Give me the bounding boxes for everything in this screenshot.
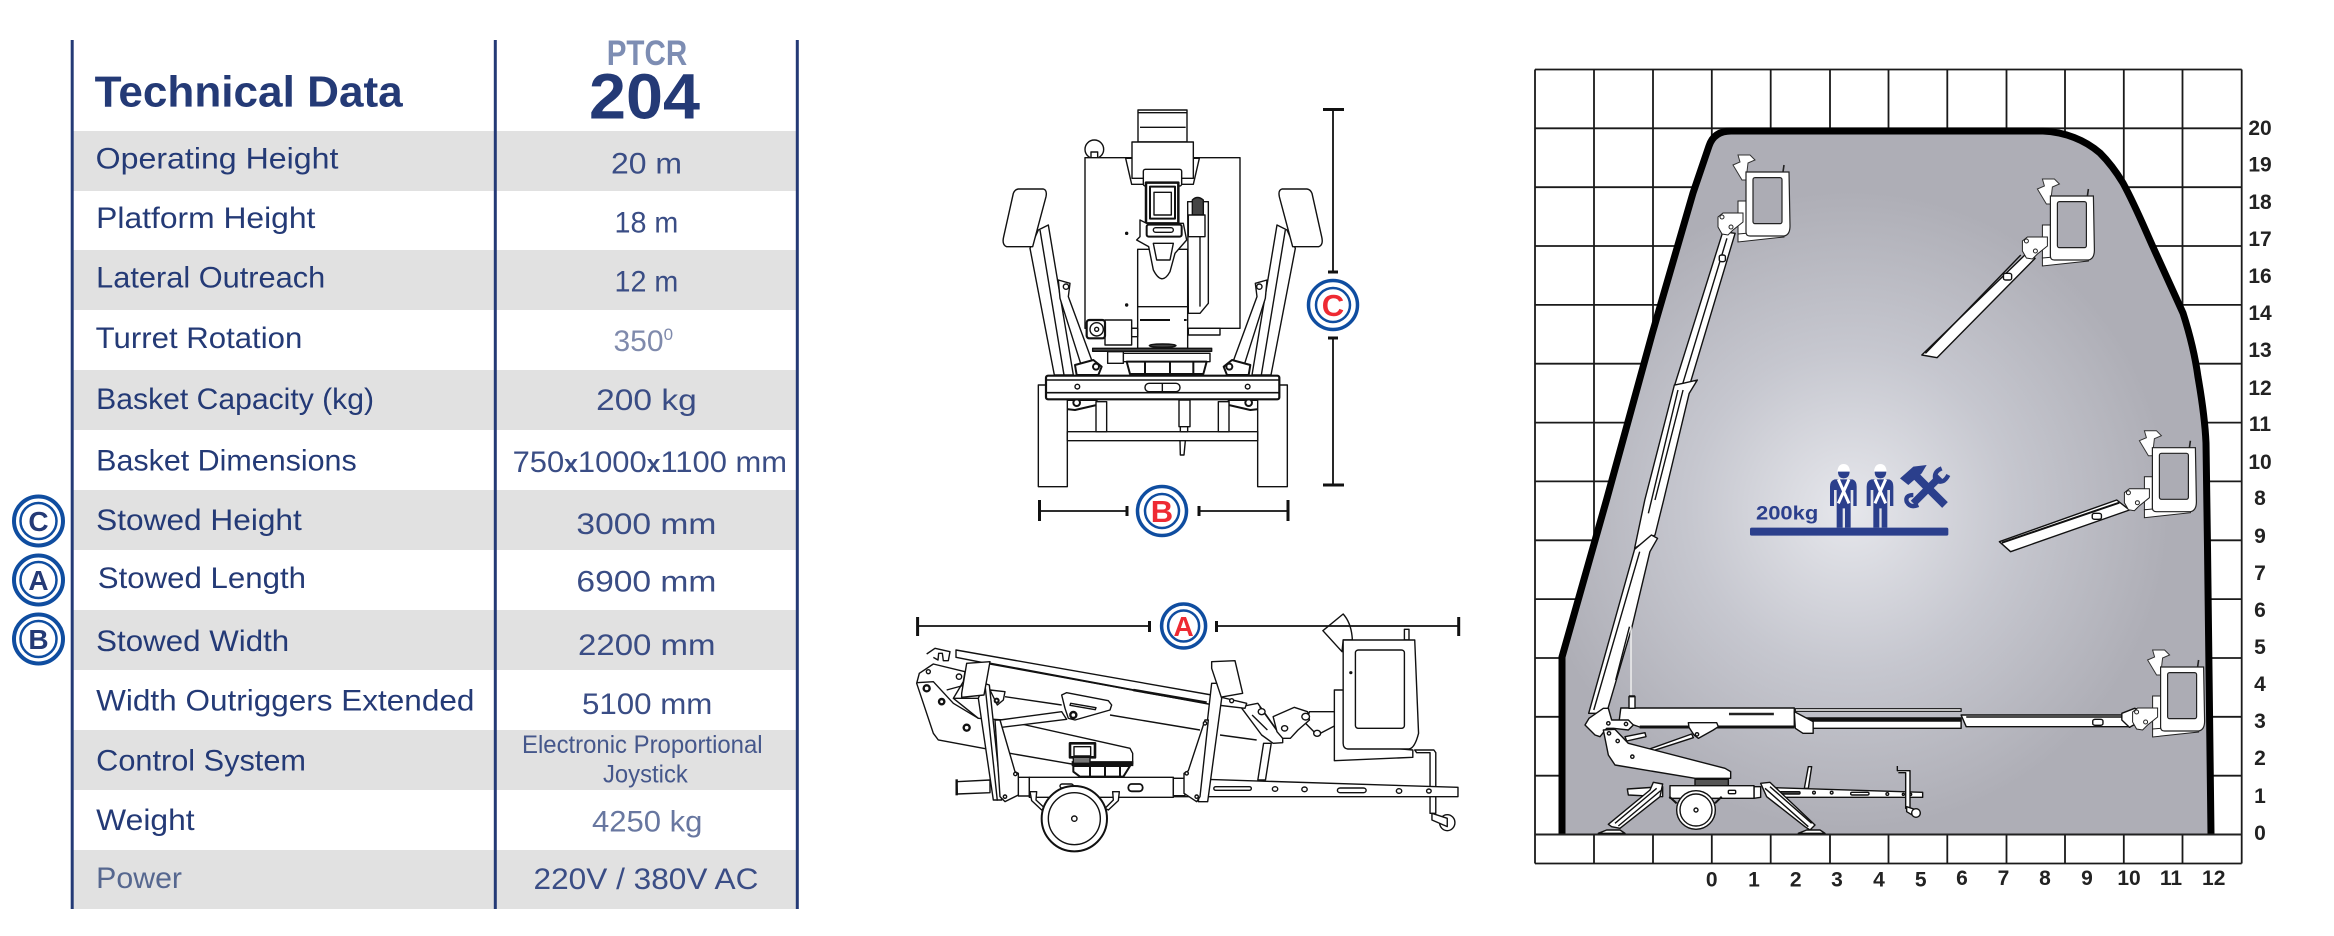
drawing: machine side view [917,614,1458,851]
icon: C badge [1308,280,1358,330]
table column rules [71,40,799,909]
row: turret rotation: Turret Rotation [96,322,302,355]
icon: A badge [1162,604,1206,648]
chart grid [1535,70,2242,864]
row: power: Power [96,862,182,895]
row: control system: Joystick [603,761,688,789]
height axis labels: 12 [2248,377,2272,400]
row: operating height: Operating Height [96,142,339,175]
height axis labels: 4 [2254,673,2266,696]
height axis labels: 10 [2248,451,2272,474]
envelope outline [1562,131,2211,834]
icon: C key badge: C [28,506,49,537]
height axis labels: 2 [2254,747,2266,770]
outreach axis labels [1706,867,2225,892]
row: platform height: 18 m [614,207,678,240]
row: control system [96,731,763,789]
capacity bar [1750,528,1948,536]
row: width outriggers extended: Width Outriggers Extended [96,685,474,718]
person [1867,464,1893,528]
row: stowed height [96,504,716,541]
row: operating height [96,142,682,180]
icon: B key badge [14,614,63,664]
capacity text: 200kg [1756,503,1818,524]
icon: B badge [1138,486,1186,536]
row: power [96,862,758,896]
model name: PTCR: PTCR [607,34,687,73]
icon: C badge: C [1322,288,1344,323]
row: stowed length: 6900 mm [576,566,716,599]
height axis labels: 6 [2254,599,2266,622]
height axis labels: 17 [2248,228,2272,251]
height axis labels: 18 [2248,191,2272,214]
outreach axis labels: 2 [1790,869,1802,892]
row: platform height: Platform Height [96,202,316,235]
right outrigger [1224,189,1322,410]
outreach axis labels: 4 [1873,869,1885,892]
height axis labels: 3 [2254,710,2266,733]
row: basket dimensions [96,445,787,479]
row: operating height: 20 m [611,147,682,180]
height axis labels: 0 [2254,822,2266,845]
model number: 204: 204 [589,60,700,132]
icon: A badge: A [1173,611,1194,642]
height axis labels: 11 [2249,413,2271,436]
height axis labels: 9 [2254,525,2266,548]
basket: lower right [2133,650,2205,737]
drawing: machine front view [1003,110,1322,487]
basket: top right [2022,179,2094,266]
row: basket dimensions: 750x1000x1100 mm [513,446,787,479]
person [1830,464,1857,528]
row: basket dimensions: Basket Dimensions [96,445,357,478]
height axis labels: 13 [2248,339,2272,362]
outreach axis labels: 7 [1998,867,2009,890]
boom: mid-high position [1922,255,2035,358]
row: stowed width: 2200 mm [578,629,716,662]
capacity label: 200kg with two persons and tools [1750,464,1948,536]
heading: technical data: Technical Data [95,68,403,117]
height axis labels: 20 [2248,117,2272,140]
row: basket capacity: Basket Capacity (kg) [96,383,374,416]
chart: working envelope [1535,70,2272,892]
height axis labels: 7 [2254,562,2266,585]
icon: C key badge [14,496,63,546]
icon: B key badge: B [28,624,49,655]
row: stowed height: Stowed Height [96,504,302,537]
outreach axis labels: 8 [2039,867,2051,890]
row: turret rotation: 0 [664,325,673,344]
icon: A key badge: A [28,565,49,596]
row: stowed width: Stowed Width [96,625,289,658]
icon: B badge: B [1151,494,1173,529]
height axis labels: 8 [2254,487,2266,510]
row: stowed height: 3000 mm [576,508,716,541]
outreach axis labels: 12 [2202,867,2225,890]
left outrigger [1003,189,1102,410]
table row shading [72,131,797,909]
towable base [1585,697,1923,833]
row: lateral outreach: Lateral Outreach [96,262,325,295]
ground line [1535,834,2242,836]
height axis labels: 14 [2248,302,2272,325]
dimension line C [1323,109,1344,485]
boom: high position [1589,232,1735,713]
boom: mid-low position [1999,500,2129,552]
row: basket capacity [96,383,697,417]
machine in working positions [1585,155,2205,833]
outreach axis labels: 0 [1706,869,1718,892]
height axis labels [2248,117,2272,845]
outreach axis labels: 3 [1831,869,1843,892]
height axis labels: 5 [2254,636,2266,659]
dimension line A [918,617,1459,636]
panel: technical data table [71,34,799,909]
row: platform height [96,202,678,240]
row: control system: Electronic Proportional [522,731,763,759]
dimension line B [1039,500,1288,521]
height axis labels: 19 [2248,154,2272,177]
row: lateral outreach: 12 m [614,266,678,299]
row: stowed length: Stowed Length [98,562,306,595]
height axis labels: 1 [2254,785,2266,808]
row: turret rotation [96,322,673,358]
row: width outriggers extended: 5100 mm [582,688,712,721]
row: control system: Control System [96,745,306,778]
boom: horizontal position [1619,708,2161,733]
outreach axis labels: 1 [1748,869,1760,892]
outreach axis labels: 11 [2160,867,2182,890]
height axis labels: 16 [2248,265,2272,288]
icon: A key badge [14,556,63,604]
outreach axis labels: 10 [2117,867,2141,890]
row: width outriggers extended [96,685,712,721]
side view: drawbar, knuckle and basket [1174,614,1458,831]
outreach axis labels: 5 [1915,869,1927,892]
row: basket capacity: 200 kg [596,384,697,417]
side view: boom, king post, chassis and wheel [917,648,1257,851]
envelope fill [1562,131,2211,834]
row: weight [96,804,702,839]
row: stowed width [96,625,715,662]
basket: top left [1718,155,1790,242]
outreach axis labels: 9 [2081,867,2093,890]
icon: crossed hammer and wrench [1900,465,1948,506]
basket: middle right [2124,431,2196,518]
outreach axis labels: 6 [1956,867,1968,890]
row: power: 220V / 380V AC [534,863,758,896]
row: stowed length [98,562,716,599]
row: weight: 4250 kg [592,806,702,839]
row: weight: Weight [96,804,195,837]
row: turret rotation: 350 [614,325,664,358]
row: lateral outreach [96,262,678,299]
